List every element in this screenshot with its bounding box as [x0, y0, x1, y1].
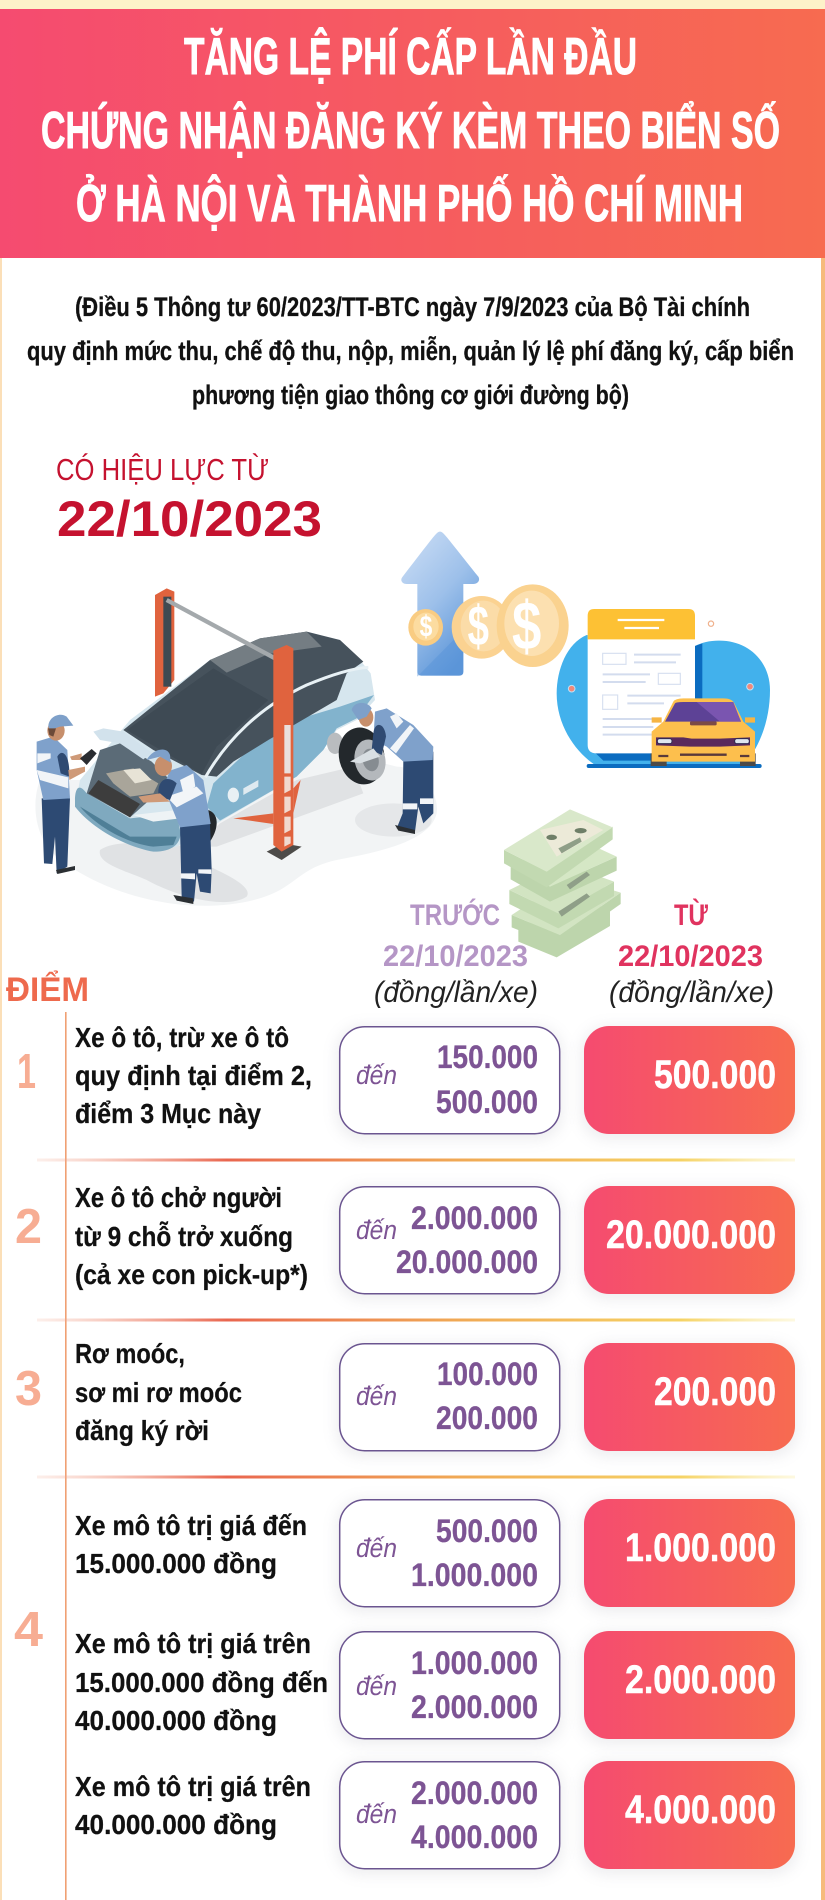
icon: rising arrow with coins: [401, 532, 569, 677]
unit labels: [374, 976, 774, 1009]
row 4c: [75, 1761, 798, 1875]
column header: before: [383, 898, 528, 973]
effective date: CÓ HIỆU LỰC TỪ: [56, 452, 269, 487]
row 3: [75, 1338, 798, 1457]
row 4a: 15.000.000 đồng: [75, 1548, 277, 1579]
row 4b: 40.000.000 đồng: [75, 1705, 277, 1736]
title: [41, 27, 780, 233]
icon: registration document with yellow car: [557, 609, 770, 768]
row 4a: [75, 1499, 798, 1613]
row 4c: Xe mô tô trị giá trên: [75, 1771, 311, 1802]
row 2: [75, 1182, 798, 1300]
row numbers: [14, 1045, 43, 1657]
row 2: 2.000.000: [411, 1200, 538, 1236]
column header: before: TRƯỚC: [410, 898, 500, 932]
legal basis text: [27, 292, 794, 410]
row 3: Rơ moóc,: [75, 1338, 185, 1369]
row 4c: đến: [356, 1799, 397, 1829]
row 2: từ 9 chỗ trở xuống: [75, 1221, 293, 1252]
row 3: đến: [356, 1381, 397, 1411]
row 1: 150.000: [437, 1039, 538, 1075]
column header: from: TỪ: [674, 898, 708, 932]
row 4b: Xe mô tô trị giá trên: [75, 1628, 311, 1659]
row 3: 100.000: [437, 1356, 538, 1392]
effective date: 22/10/2023: [57, 491, 322, 547]
icon: rising arrow with coins: $: [420, 611, 433, 644]
row 4b: 1.000.000: [411, 1645, 538, 1681]
row numbers: 2: [15, 1200, 42, 1254]
icon: rising arrow with coins: $: [468, 595, 489, 658]
row 2: 20.000.000: [606, 1213, 776, 1257]
row 1: Xe ô tô, trừ xe ô tô: [75, 1022, 289, 1053]
row 1: 500.000: [436, 1084, 538, 1120]
row 2: (cả xe con pick-up*): [75, 1259, 308, 1290]
row 4b: 2.000.000: [625, 1658, 776, 1702]
row 4b: 15.000.000 đồng đến: [75, 1667, 328, 1698]
row 4c: 4.000.000: [411, 1819, 538, 1855]
unit labels: (đồng/lần/xe): [374, 976, 538, 1009]
row 4a: 500.000: [436, 1513, 538, 1549]
row numbers: 1: [17, 1045, 36, 1099]
row 1: quy định tại điểm 2,: [75, 1060, 312, 1091]
row 3: 200.000: [654, 1370, 776, 1414]
row 4a: 1.000.000: [411, 1557, 538, 1593]
row 4a: 1.000.000: [625, 1526, 776, 1570]
row 1: đến: [356, 1060, 397, 1090]
header banner: [0, 9, 825, 258]
row 1: 500.000: [654, 1053, 776, 1097]
row numbers: 4: [14, 1603, 43, 1657]
column header: from: 22/10/2023: [618, 940, 763, 973]
row 4b: 2.000.000: [411, 1689, 538, 1725]
effective date: [56, 452, 322, 547]
row 4b: đến: [356, 1671, 397, 1701]
illustration: mechanics servicing car: [35, 588, 437, 906]
row 3: sơ mi rơ moóc: [75, 1377, 242, 1408]
row 4c: 4.000.000: [625, 1788, 776, 1832]
column header: from: [618, 898, 763, 973]
row 2: đến: [356, 1215, 397, 1245]
legal basis text: phương tiện giao thông cơ giới đường bộ): [192, 380, 629, 410]
column header: before: 22/10/2023: [383, 940, 528, 973]
icon: rising arrow with coins: $: [512, 588, 541, 664]
row 4a: Xe mô tô trị giá đến: [75, 1510, 307, 1541]
row 1: [75, 1022, 798, 1140]
row 2: 20.000.000: [396, 1244, 538, 1280]
row numbers: 3: [15, 1362, 42, 1416]
row 1: điểm 3 Mục này: [75, 1098, 261, 1129]
unit labels: (đồng/lần/xe): [609, 976, 774, 1009]
row 3: đăng ký rời: [75, 1415, 209, 1446]
row 4a: đến: [356, 1533, 397, 1563]
row 3: 200.000: [436, 1400, 538, 1436]
row 4c: 2.000.000: [411, 1775, 538, 1811]
column header: point: ĐIỂM: [6, 971, 89, 1009]
icon: stack of banknotes: [504, 809, 621, 957]
row 4b: [75, 1628, 798, 1745]
row 2: Xe ô tô chở người: [75, 1182, 282, 1213]
row 4c: 40.000.000 đồng: [75, 1809, 277, 1840]
